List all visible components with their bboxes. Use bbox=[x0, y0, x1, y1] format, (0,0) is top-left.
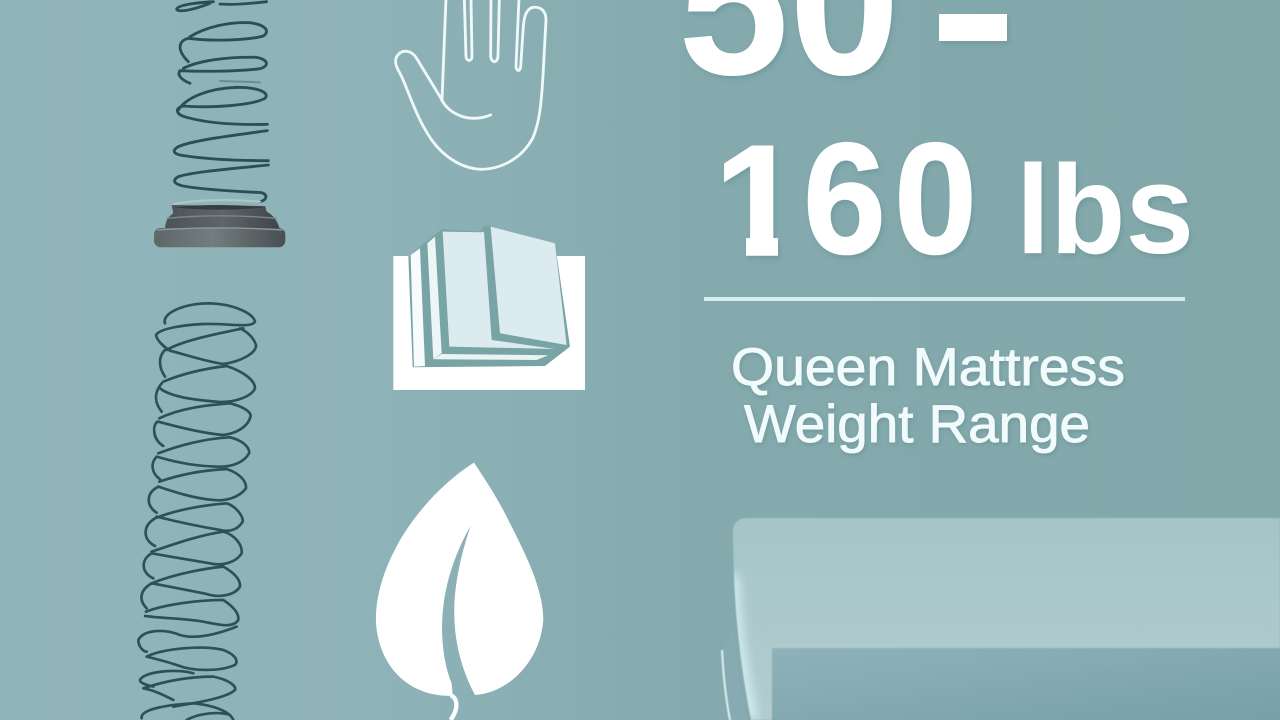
upper spring coil bbox=[173, 2, 268, 204]
mattress front face bbox=[772, 648, 1280, 720]
label: Queen Mattress Weight Range bbox=[731, 338, 1125, 454]
big number: 160 lbs: 0 bbox=[894, 111, 977, 287]
big number: 160 lbs: 6 bbox=[803, 111, 886, 287]
label: Queen Mattress Weight Range: Queen Mattress bbox=[731, 338, 1125, 397]
mattress left edge highlight bbox=[733, 575, 752, 720]
mattress bbox=[722, 518, 1280, 720]
icon: layered foam pages bbox=[393, 225, 585, 390]
big number: 160 lbs: 1 bbox=[714, 113, 802, 289]
big number: 50- bbox=[678, 0, 1007, 119]
divider rule bbox=[704, 297, 1185, 301]
mattress side strip bbox=[722, 630, 748, 720]
icon: hand bbox=[396, 0, 546, 169]
lower extended spring coil bbox=[138, 303, 256, 720]
label: Queen Mattress Weight Range: Weight Range bbox=[744, 395, 1090, 454]
upper compressed spring with base bbox=[154, 2, 285, 247]
spring base bbox=[154, 205, 285, 247]
big number: 160 lbs: lbs bbox=[1016, 139, 1194, 280]
icon: leaf bbox=[376, 463, 543, 720]
mattress top surface bbox=[733, 518, 1280, 720]
big number: 160 lbs bbox=[724, 142, 1191, 259]
